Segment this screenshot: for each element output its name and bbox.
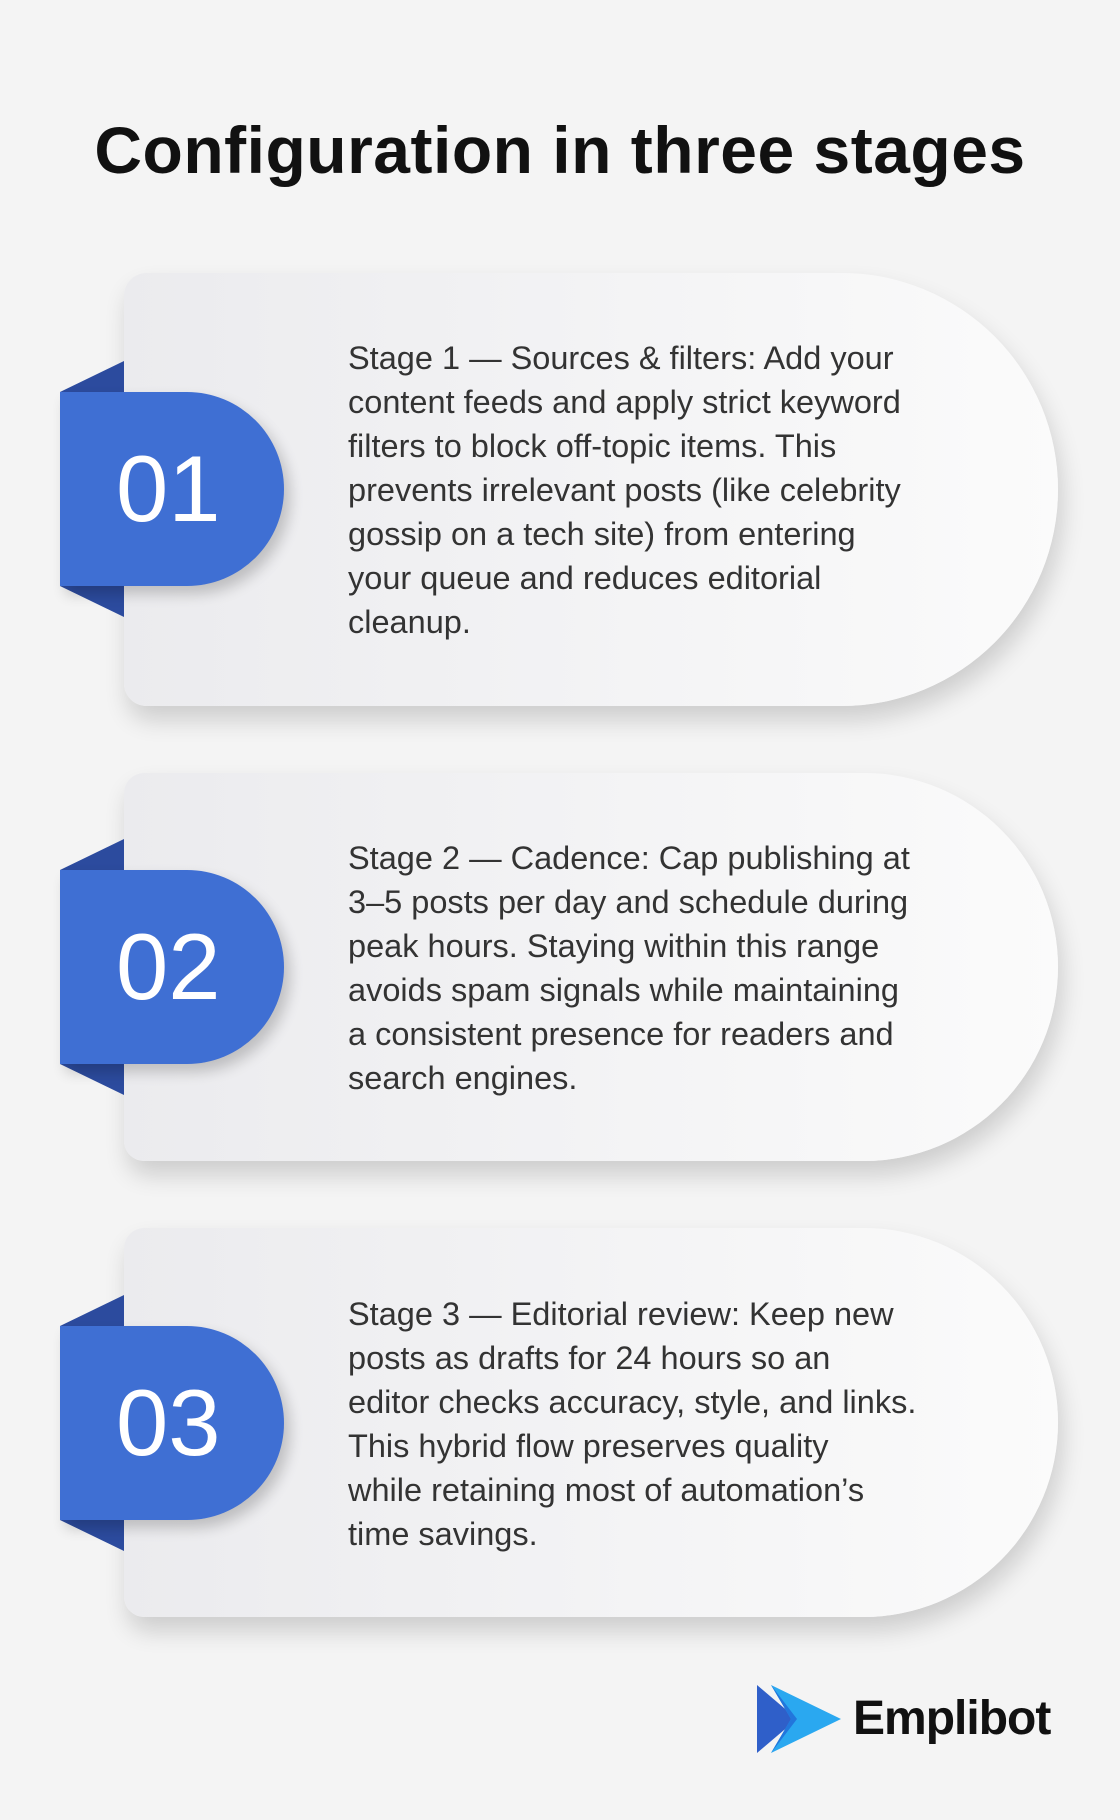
text: stage 2: 3–5 posts per day and schedule during [348,884,908,920]
text: stage 3: This hybrid flow preserves quality [348,1428,828,1464]
text: stage 1: Stage 1 — Sources & filters: Add your [348,340,894,376]
text: stage 3: editor checks accuracy, style, and links. [348,1384,916,1420]
text: stage 3: Stage 3 — Editorial review: Keep new [348,1296,894,1332]
text: stage 1: gossip on a tech site) from entering [348,516,856,552]
badge: 03 [60,1295,296,1551]
badge: 01 [60,361,296,617]
badge: 01: 01 [116,436,221,541]
text: stage 1 [348,340,901,640]
text: stage 3: time savings. [348,1516,538,1552]
badge: 02: 02 [116,914,221,1019]
text: stage 1: content feeds and apply strict keyword [348,384,901,420]
text: stage 1: cleanup. [348,604,471,640]
text: stage 1: filters to block off-topic items. This [348,428,836,464]
text: stage 2: search engines. [348,1060,577,1096]
text: stage 2: avoids spam signals while maintaining [348,972,899,1008]
text: stage 2: peak hours. Staying within this range [348,928,879,964]
text: stage 2: Stage 2 — Cadence: Cap publishing at [348,840,910,876]
title: Configuration in three stages [94,113,1026,187]
text: stage 1: your queue and reduces editorial [348,560,821,596]
panel: stage 1 card [124,273,1058,706]
brand name: Emplibot [853,1692,1050,1745]
text: stage 2 [348,840,910,1096]
text: stage 2: a consistent presence for readers and [348,1016,894,1052]
text: stage 3 [348,1296,916,1552]
icon: play logo [757,1685,841,1753]
text: stage 3: posts as drafts for 24 hours so an [348,1340,830,1376]
logo [757,1685,1051,1753]
badge: 03: 03 [116,1370,221,1475]
text: stage 3: while retaining most of automation’s [348,1472,864,1508]
panel: stage 2 card [124,773,1058,1161]
badge: 02 [60,839,296,1095]
panel: stage 3 card [124,1228,1058,1617]
text: stage 1: prevents irrelevant posts (like celebrity [348,472,901,508]
